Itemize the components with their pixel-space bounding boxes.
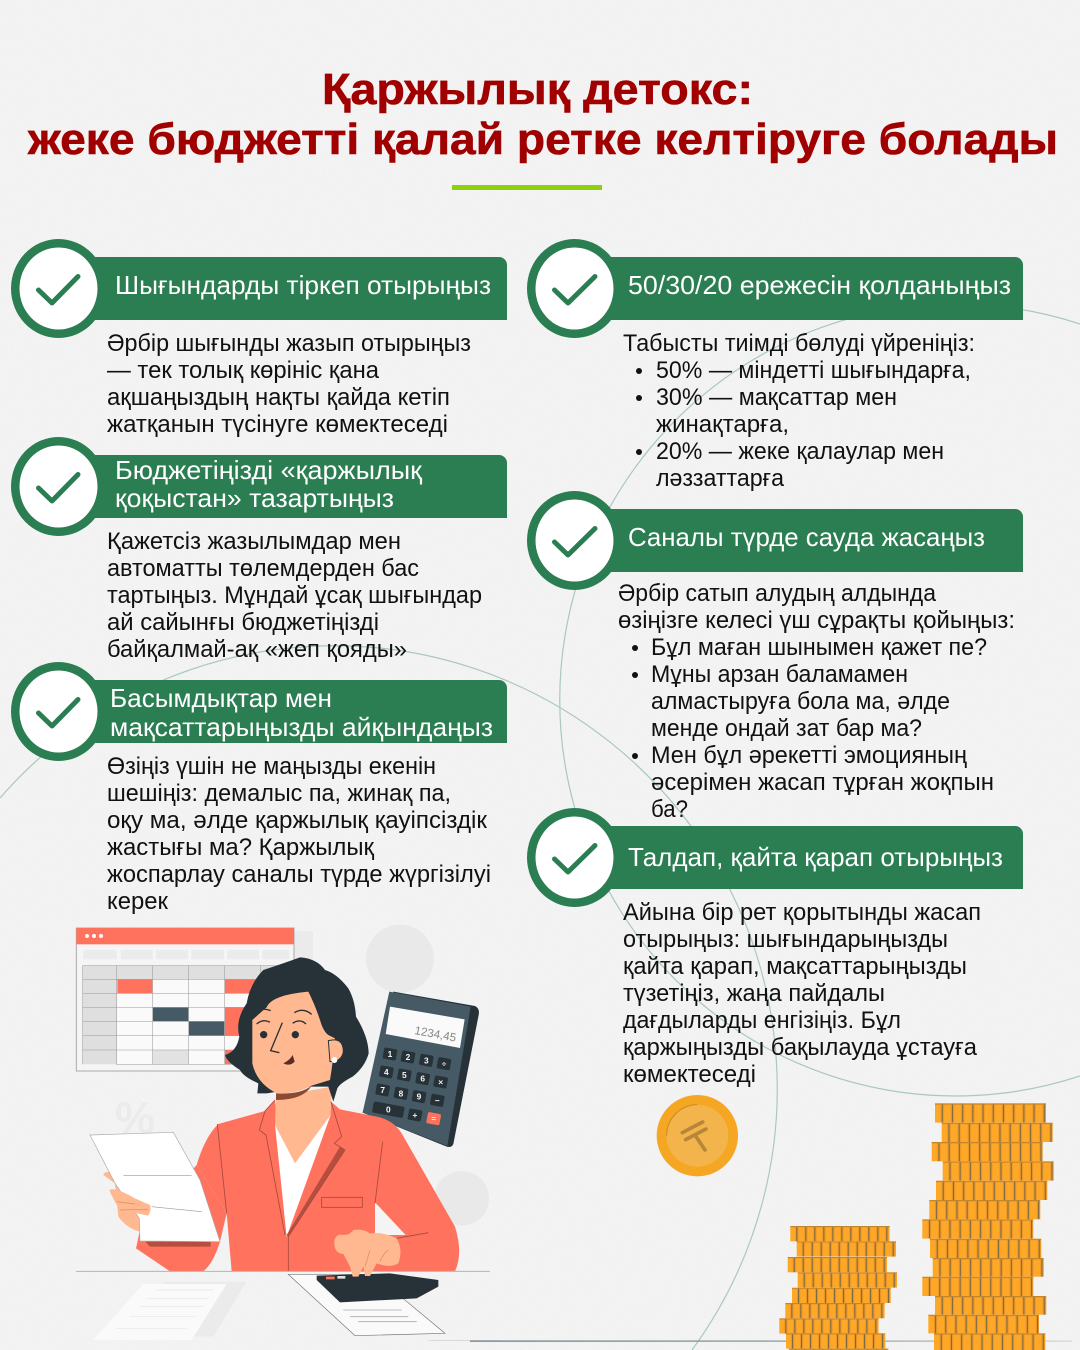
text: track expenses: жатқанын түсінуге көмектеседі bbox=[107, 411, 448, 438]
text: track expenses: — тек толық көрініс қана bbox=[107, 357, 379, 384]
paper held in hand bbox=[90, 1132, 220, 1242]
calculator: 2 bbox=[406, 1052, 411, 1062]
background shapes: % bbox=[115, 1092, 155, 1143]
header: review: Талдап, қайта қарап отырыңыз bbox=[628, 842, 1003, 872]
table line and papers bbox=[76, 1271, 500, 1341]
header: track expenses bbox=[11, 239, 507, 338]
text: financial junk: автоматты төлемдерден бас bbox=[107, 555, 419, 582]
header: track expenses: Шығындарды тіркеп отырыңыз bbox=[115, 270, 491, 300]
text: priorities: жоспарлау саналы түрде жүргізілуі bbox=[107, 861, 491, 888]
panel: priorities bbox=[11, 662, 507, 915]
text: review bbox=[623, 899, 981, 1088]
header: conscious shopping: Саналы түрде сауда жасаңыз bbox=[628, 522, 985, 552]
text: financial junk: байқалмай-ақ «жеп қояды» bbox=[107, 636, 407, 663]
calculator: 3 bbox=[424, 1055, 429, 1065]
text: conscious shopping: өзіңізге келесі үш сұрақты қойыңыз: bbox=[618, 607, 1015, 634]
text: 50/30/20 rule: Табысты тиімді бөлуді үйреніңіз: bbox=[623, 330, 975, 357]
text: review: қаржыңызды бақылауда ұстауға bbox=[623, 1034, 977, 1061]
text: 50/30/20 rule: 30% — мақсаттар мен bbox=[656, 384, 897, 411]
text: 50/30/20 rule: жинақтарға, bbox=[656, 411, 789, 438]
text: priorities: жастығы ма? Қаржылық bbox=[107, 834, 374, 861]
calculator: 1 bbox=[388, 1049, 393, 1059]
icon: tenge coin bbox=[657, 1095, 738, 1176]
text: financial junk: ай сайынғы бюджетіңізді bbox=[107, 609, 379, 636]
calculator bbox=[363, 992, 479, 1147]
text: track expenses: Әрбір шығынды жазып отырыңыз bbox=[107, 330, 471, 357]
text: priorities: оқу ма, әлде қаржылық қауіпсіздік bbox=[107, 807, 487, 834]
text: 50/30/20 rule: ләззаттарға bbox=[656, 465, 784, 492]
calculator: 9 bbox=[417, 1092, 422, 1102]
header: 50/30/20 rule: 50/30/20 ережесін қолданыңыз bbox=[628, 270, 1011, 300]
text: conscious shopping: ба? bbox=[651, 796, 688, 823]
text: conscious shopping: Әрбір сатып алудың алдында bbox=[618, 580, 936, 607]
text: 50/30/20 rule bbox=[623, 330, 975, 492]
text: conscious shopping: әсерімен жасап тұрған жоқпын bbox=[651, 769, 994, 796]
header: 50/30/20 rule bbox=[527, 239, 1023, 338]
header: priorities bbox=[11, 662, 507, 761]
text: conscious shopping bbox=[618, 580, 1015, 823]
title underline bbox=[452, 185, 602, 190]
text: financial junk bbox=[107, 528, 482, 663]
calculator: + bbox=[413, 1110, 418, 1120]
text: review: көмектеседі bbox=[623, 1061, 756, 1088]
panel: financial junk bbox=[11, 437, 507, 663]
text: review: түзетіңіз, жаңа пайдалы bbox=[623, 980, 885, 1007]
calculator: 8 bbox=[399, 1088, 404, 1098]
calculator: 5 bbox=[402, 1070, 407, 1080]
text: financial junk: тартыңыз. Мұндай ұсақ шығындар bbox=[107, 582, 482, 609]
calculator: 1234,45 bbox=[413, 1024, 457, 1045]
header: financial junk: Бюджетіңізді «қаржылық bbox=[115, 455, 423, 485]
text: priorities: керек bbox=[107, 888, 168, 915]
text: conscious shopping: Бұл маған шынымен қажет пе? bbox=[651, 634, 987, 661]
calculator: 4 bbox=[384, 1067, 389, 1077]
header: priorities: Басымдықтар мен bbox=[110, 683, 332, 713]
calculator: − bbox=[435, 1095, 440, 1105]
text: review: отырыңыз: шығындарыңызды bbox=[623, 926, 948, 953]
illustration: woman with calculator and calendar bbox=[76, 925, 500, 1341]
text: review: қайта қарап, мақсаттарыңызды bbox=[623, 953, 967, 980]
text: review: дағдыларды енгізіңіз. Бұл bbox=[623, 1007, 901, 1034]
woman bbox=[136, 957, 459, 1271]
panel: review bbox=[527, 808, 1023, 1088]
text: track expenses bbox=[107, 330, 471, 438]
title: жеке бюджетті қалай ретке келтіруге болады bbox=[27, 115, 1058, 164]
text: conscious shopping: Мұны арзан баламамен bbox=[651, 661, 908, 688]
header: financial junk bbox=[11, 437, 507, 536]
desk calculator and hand bbox=[317, 1230, 438, 1302]
text: priorities: Өзіңіз үшін не маңызды екенін bbox=[107, 753, 436, 780]
header: priorities: мақсаттарыңызды айқындаңыз bbox=[110, 712, 493, 742]
calculator: ÷ bbox=[442, 1059, 447, 1069]
header: review bbox=[527, 808, 1023, 907]
panel: 50/30/20 rule bbox=[527, 239, 1023, 492]
calculator: 7 bbox=[380, 1085, 385, 1095]
text: priorities bbox=[107, 753, 491, 915]
text: conscious shopping: менде ондай зат бар ма? bbox=[651, 715, 922, 742]
title: Қаржылық детокс: bbox=[322, 65, 753, 114]
header: financial junk: қоқыстан» тазартыңыз bbox=[115, 483, 394, 513]
coin stack: small bbox=[779, 1226, 897, 1350]
text: financial junk: Қажетсіз жазылымдар мен bbox=[107, 528, 401, 555]
panel: track expenses bbox=[11, 239, 507, 438]
panel: conscious shopping bbox=[527, 491, 1023, 823]
calculator: × bbox=[438, 1077, 443, 1087]
text: review: Айына бір рет қорытынды жасап bbox=[623, 899, 981, 926]
header: conscious shopping bbox=[527, 491, 1023, 590]
calculator: = bbox=[431, 1114, 436, 1124]
title bbox=[27, 65, 1058, 164]
text: conscious shopping: алмастыруға бола ма, әлде bbox=[651, 688, 950, 715]
calendar table bbox=[76, 928, 294, 1071]
text: 50/30/20 rule: 20% — жеке қалаулар мен bbox=[656, 438, 944, 465]
calculator: 0 bbox=[386, 1105, 391, 1115]
text: 50/30/20 rule: 50% — міндетті шығындарға, bbox=[656, 357, 971, 384]
floor line bbox=[470, 1340, 1072, 1342]
text: conscious shopping: Мен бұл әрекетті эмоцияның bbox=[651, 742, 967, 769]
calculator: 6 bbox=[420, 1074, 425, 1084]
coin stack: large bbox=[922, 1103, 1054, 1350]
text: track expenses: ақшаңыздың нақты қайда кетіп bbox=[107, 384, 450, 411]
background shapes bbox=[115, 925, 489, 1226]
text: priorities: шешіңіз: демалыс па, жинақ па, bbox=[107, 780, 451, 807]
